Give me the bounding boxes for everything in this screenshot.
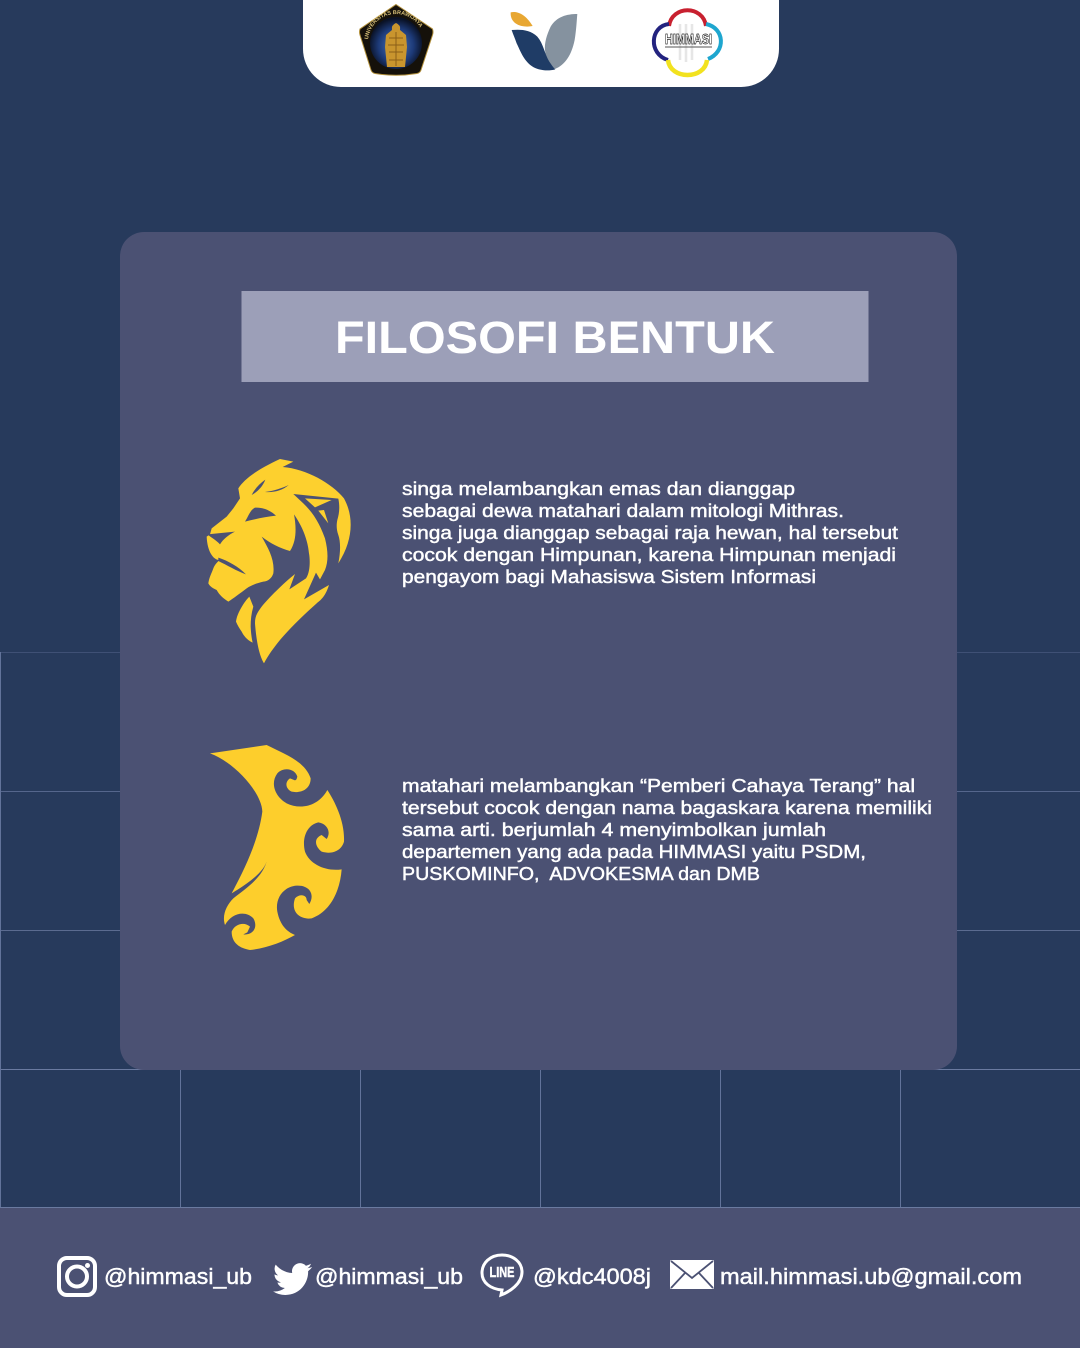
- logo: HIMMASI: HIMMASI: [665, 31, 712, 48]
- logo: HIMMASI: [654, 10, 721, 75]
- text: lion description: singa melambangkan emas dan dianggap: [402, 478, 795, 499]
- icon: lion head: [207, 459, 351, 663]
- text: sun description: tersebut cocok dengan nama bagaskara karena memiliki: [402, 797, 932, 818]
- text: sun description: matahari melambangkan “Pemberi Cahaya Terang” hal: [402, 775, 915, 796]
- title: FILOSOFI BENTUK: [335, 312, 776, 363]
- icon: line: LINE: [490, 1264, 514, 1281]
- logo: Universitas Brawijaya: [359, 4, 434, 76]
- text: lion description: singa juga dianggap sebagai raja hewan, hal tersebut: [402, 522, 898, 543]
- text: lion description: pengayom bagi Mahasiswa Sistem Informasi: [402, 566, 816, 587]
- text: line id: @kdc4008j: [533, 1264, 651, 1289]
- lion dark cuts: [207, 480, 289, 574]
- icon: mail: [670, 1260, 714, 1289]
- text: instagram handle: @himmasi_ub: [104, 1264, 252, 1289]
- footer: social contacts: [0, 1207, 1080, 1348]
- icon: instagram: [59, 1258, 95, 1295]
- text: twitter handle: @himmasi_ub: [315, 1264, 463, 1289]
- icon: twitter: [273, 1263, 312, 1295]
- text: lion description: sebagai dewa matahari dalam mitologi Mithras.: [402, 500, 844, 521]
- text: lion description: cocok dengan Himpunan, karena Himpunan menjadi: [402, 544, 896, 565]
- panel: filosofi bentuk: [120, 232, 957, 1070]
- text: lion description: [402, 478, 898, 587]
- text: sun description: sama arti. berjumlah 4 menyimbolkan jumlah: [402, 819, 826, 840]
- title: [242, 291, 868, 382]
- text: email: mail.himmasi.ub@gmail.com: [720, 1264, 1022, 1289]
- logo: Bagaskara V mark: [511, 12, 577, 70]
- icon: line: [482, 1255, 522, 1295]
- text: sun description: PUSKOMINFO, ADVOKESMA dan DMB: [402, 863, 760, 884]
- header: logo tab: [303, 0, 779, 87]
- icon: sun crescent: [210, 745, 344, 950]
- text: sun description: departemen yang ada pada HIMMASI yaitu PSDM,: [402, 841, 866, 862]
- logo: Universitas Brawijaya: UNIVERSITAS BRAWIJAYA: [364, 10, 422, 39]
- text: sun description: [402, 775, 932, 884]
